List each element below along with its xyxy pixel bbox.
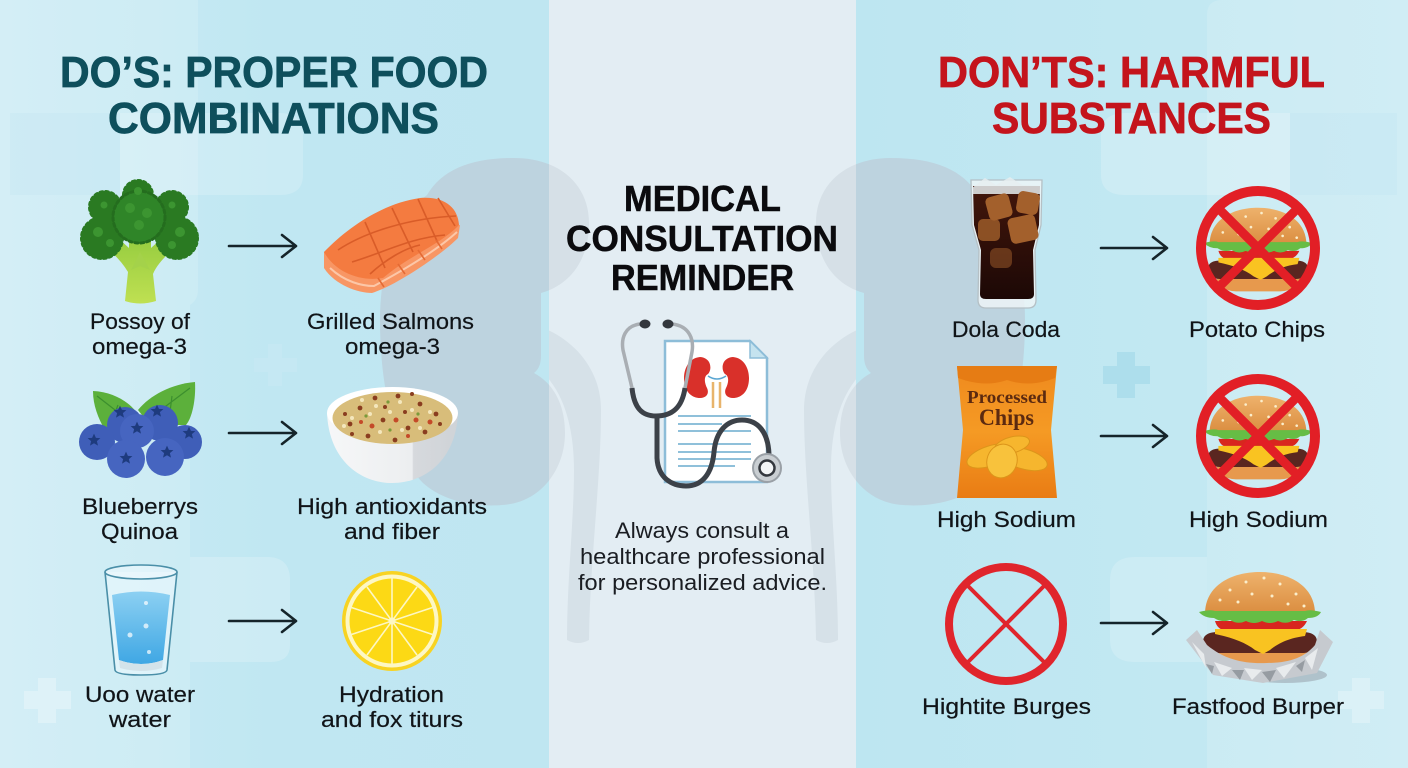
icon: processed chips bag bbox=[957, 366, 1057, 498]
icon: prohibition sign bbox=[949, 567, 1063, 681]
label: high sodium: High Sodium bbox=[937, 507, 1076, 532]
label: possoy of omega-3: omega-3 bbox=[92, 334, 187, 359]
text: consult advice bbox=[578, 518, 827, 595]
label: possoy of omega-3 bbox=[90, 309, 191, 359]
label: blueberrys quinoa: Blueberrys bbox=[82, 494, 198, 519]
label: hydration and fox titurs: and fox titurs bbox=[321, 707, 463, 732]
label: uoo water: Uoo water bbox=[85, 682, 195, 707]
heading: don'ts bbox=[938, 48, 1325, 143]
arrow bbox=[1101, 425, 1167, 447]
label: grilled salmons omega-3: Grilled Salmons bbox=[307, 309, 474, 334]
arrow bbox=[229, 235, 296, 257]
icon: no burger bbox=[1201, 379, 1315, 493]
arrow bbox=[1101, 612, 1167, 634]
arrow bbox=[229, 422, 296, 444]
heading: don'ts: SUBSTANCES bbox=[992, 94, 1271, 143]
arrow bbox=[229, 610, 296, 632]
label: grilled salmons omega-3 bbox=[307, 309, 474, 359]
icon: processed chips bag: Chips bbox=[979, 405, 1034, 430]
label: high antioxidants and fiber: and fiber bbox=[344, 519, 440, 544]
heading: medical consultation reminder: REMINDER bbox=[611, 257, 794, 298]
heading: do's: DO’S: PROPER FOOD bbox=[60, 48, 488, 97]
icon: lemon slice bbox=[342, 571, 442, 671]
heading: medical consultation reminder: CONSULTATION bbox=[566, 218, 838, 259]
label: high antioxidants and fiber bbox=[297, 494, 487, 544]
label: dola coda: Dola Coda bbox=[952, 317, 1061, 342]
label: uoo water bbox=[85, 682, 195, 732]
text: consult advice: for personalized advice. bbox=[578, 570, 827, 595]
icon: cola glass bbox=[971, 177, 1042, 308]
heading: do's bbox=[60, 48, 488, 143]
text: consult advice: healthcare professional bbox=[580, 544, 825, 569]
icon: blueberries bbox=[79, 382, 202, 478]
icon: broccoli bbox=[82, 181, 197, 304]
icon: no burger bbox=[1201, 191, 1315, 305]
label: high sodium: High Sodium bbox=[1189, 507, 1328, 532]
icon: processed chips bag: Processed bbox=[967, 387, 1047, 407]
label: grilled salmons omega-3: omega-3 bbox=[345, 334, 440, 359]
heading: medical consultation reminder bbox=[566, 178, 838, 298]
icon: grilled salmon bbox=[324, 198, 460, 293]
heading: do's: COMBINATIONS bbox=[108, 94, 439, 143]
heading: don'ts: DON’TS: HARMFUL bbox=[938, 48, 1325, 97]
background: kidney silhouettes bbox=[380, 158, 1025, 643]
label: hightite burges: Hightite Burges bbox=[922, 694, 1091, 719]
label: high antioxidants and fiber: High antioxidants bbox=[297, 494, 487, 519]
text: consult advice: Always consult a bbox=[615, 518, 790, 543]
label: potato chips: Potato Chips bbox=[1189, 317, 1325, 342]
label: possoy of omega-3: Possoy of bbox=[90, 309, 191, 334]
label: blueberrys quinoa bbox=[82, 494, 198, 544]
background: small crosses bbox=[24, 344, 1384, 723]
icon: glass of water bbox=[105, 565, 177, 675]
heading: medical consultation reminder: MEDICAL bbox=[624, 178, 781, 219]
icon: quinoa bowl bbox=[327, 387, 458, 483]
label: blueberrys quinoa: Quinoa bbox=[101, 519, 179, 544]
label: uoo water: water bbox=[108, 707, 171, 732]
icon: stethoscope with kidney report bbox=[623, 320, 781, 486]
label: hydration and fox titurs: Hydration bbox=[339, 682, 444, 707]
label: fastfood burper: Fastfood Burper bbox=[1172, 694, 1344, 719]
icon: fast food burger in foil bbox=[1186, 572, 1333, 683]
label: hydration and fox titurs bbox=[321, 682, 463, 732]
arrow bbox=[1101, 237, 1167, 259]
